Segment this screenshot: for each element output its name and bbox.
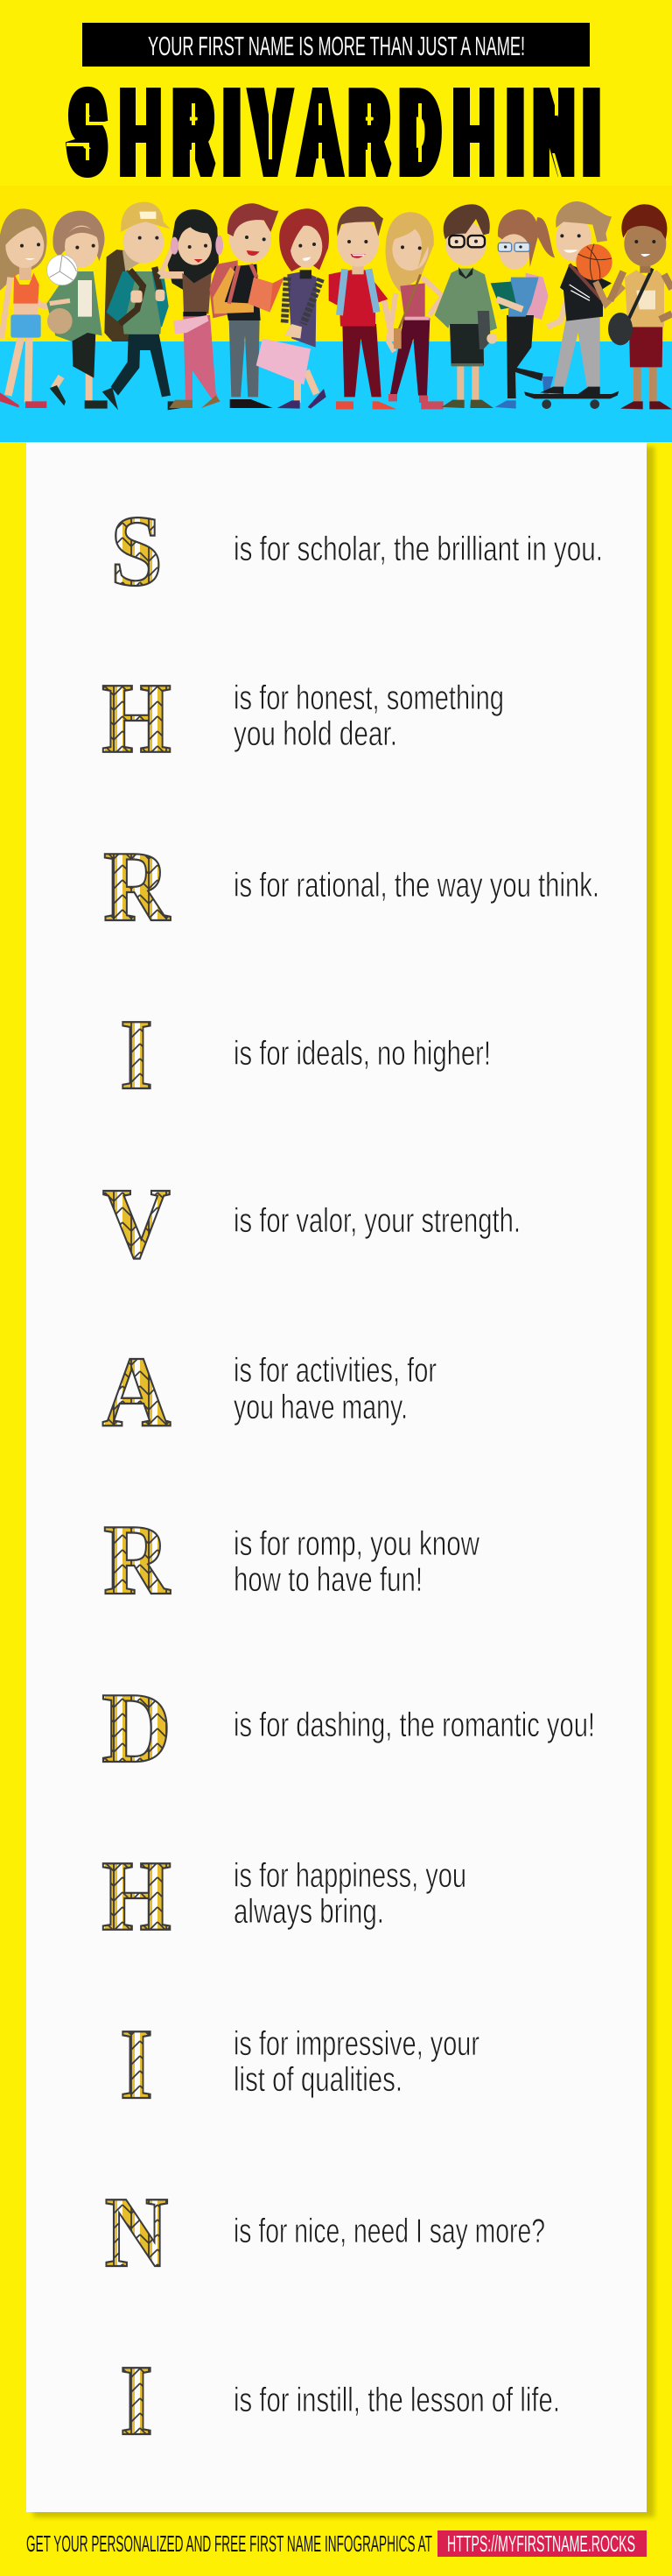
person: girl in orange top [0,208,64,408]
person: girl with volleyball [46,211,108,409]
row: A: A [102,1336,172,1448]
row: H: H [102,663,172,775]
row: A: you have many. [234,1389,408,1426]
row: I [120,2009,480,2121]
row: N: N [105,2177,168,2289]
row: I [120,999,491,1111]
row: I [120,2345,560,2457]
person: girl with ponytail and tablet [491,209,555,409]
person: girl with headphones [159,209,223,408]
person: boy in jersey with bag [608,204,672,409]
people right half [329,201,672,409]
person: blonde girl [386,212,444,409]
row: H: always bring. [234,1893,384,1931]
row: A [102,1336,437,1448]
row: S: S [110,496,163,608]
row: H: you hold dear. [234,715,397,753]
person: boy in red tee [329,207,396,409]
row: V: V [102,1168,171,1280]
illustration: group of students [0,186,672,442]
row: H: H [102,1841,172,1953]
row: D: D [102,1672,172,1784]
person: boy on skateboard with basketball [524,201,623,409]
row: R: is for romp, you know [234,1525,480,1563]
row: R: R [103,831,171,943]
row: S [110,496,603,608]
row: I: I [120,2009,153,2121]
row: H [102,663,504,775]
row: R [103,1504,480,1616]
name heading: SHRIVARDHINI [69,74,599,191]
people left half [0,202,329,410]
row: I: list of qualities. [234,2061,402,2099]
row: I: is for instill, the lesson of life. [234,2382,560,2419]
panel: letters [26,442,654,2517]
row: A: is for activities, for [234,1352,437,1390]
row: R: how to have fun! [234,1561,423,1599]
person: girl with pink bag [256,208,329,409]
row: D [102,1672,595,1784]
row: R [103,831,599,943]
person: boy with cap and backpack [102,202,186,410]
row: I: is for ideals, no higher! [234,1035,491,1073]
row: I: I [120,999,153,1111]
row: R: R [103,1504,171,1616]
row: I: I [120,2345,153,2457]
person: boy with glasses and laptop [435,204,497,408]
person: boy reading a book [209,203,284,408]
row: N [105,2177,545,2289]
row: H: is for honest, something [234,679,504,717]
tagline banner [82,23,590,67]
row: H: is for happiness, you [234,1857,466,1895]
row: V: is for valor, your strength. [234,1202,521,1240]
row: V [102,1168,521,1280]
row: H [102,1841,466,1953]
row: I: is for impressive, your [234,2025,480,2063]
row: N: is for nice, need I say more? [234,2213,545,2250]
